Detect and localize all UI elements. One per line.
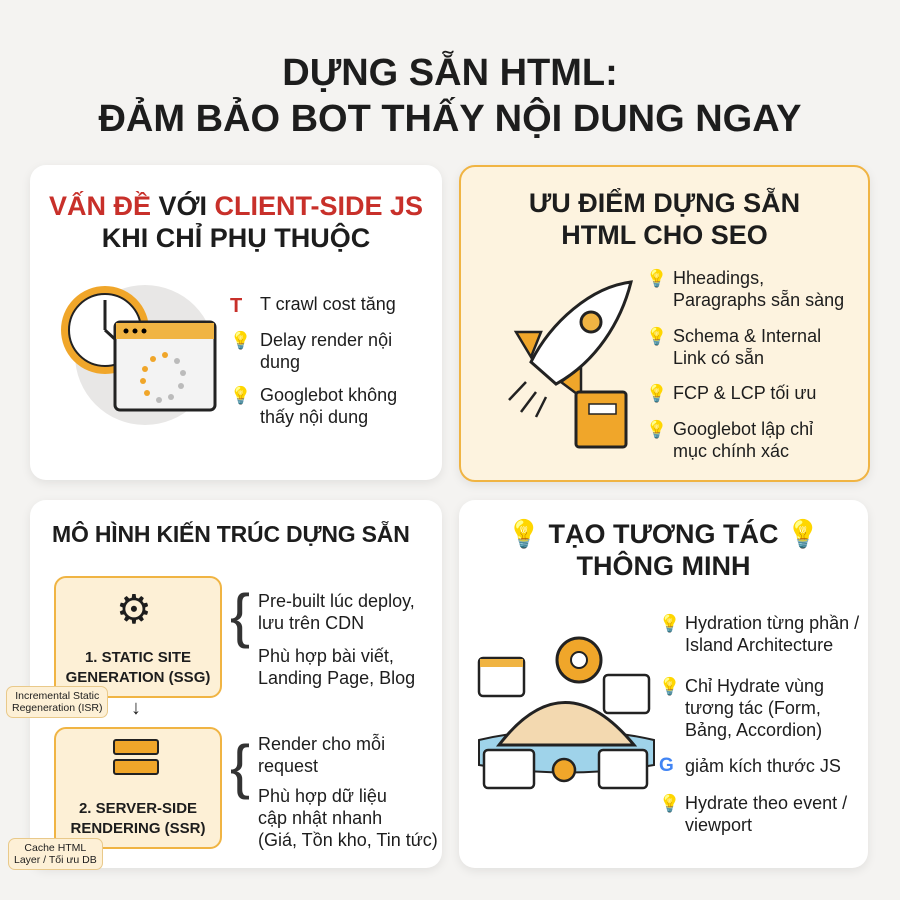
panel: interaction xyxy=(459,500,868,868)
tag: cache: Layer / Tối ưu DB xyxy=(14,854,97,866)
heading: advantages: ƯU ĐIỂM DỰNG SẴN xyxy=(529,188,800,218)
box: SSG: ⚙ xyxy=(116,588,152,632)
text: SSR details: Phù hợp dữ liệu xyxy=(258,786,387,806)
box: SSG: 1. STATIC SITE xyxy=(85,649,191,666)
text: SSG details: { xyxy=(230,582,250,649)
list: interaction: Hydration từng phần / xyxy=(685,613,859,633)
list: problems: Delay render nội xyxy=(260,330,392,350)
heading: architecture: MÔ HÌNH KIẾN TRÚC DỰNG SẴN xyxy=(52,521,410,547)
list: problems xyxy=(230,294,397,427)
heading: problem: VẤN ĐỀ VỚI CLIENT-SIDE JS xyxy=(49,191,423,221)
text: SSR details: Render cho mỗi xyxy=(258,734,385,754)
list: interaction xyxy=(659,613,860,835)
text: SSG details: Pre-built lúc deploy, xyxy=(258,591,415,611)
box: SSR: 2. SERVER-SIDE xyxy=(79,800,197,817)
title: ĐẢM BẢO BOT THẤY NỘI DUNG NGAY xyxy=(98,98,802,140)
list: problems: T crawl cost tăng xyxy=(260,294,396,314)
list: problems: Googlebot không xyxy=(260,385,397,405)
list: advantages: 💡 xyxy=(646,269,667,288)
list: interaction: 💡 xyxy=(659,794,680,813)
list: problems: T xyxy=(230,295,242,317)
list: interaction: Island Architecture xyxy=(685,635,833,655)
list: advantages: 💡 xyxy=(646,384,667,403)
list: advantages: Schema & Internal xyxy=(673,326,821,346)
list: interaction: viewport xyxy=(685,815,752,835)
list: advantages: 💡 xyxy=(646,420,667,439)
list: interaction: 💡 xyxy=(659,677,680,696)
text: SSG details: lưu trên CDN xyxy=(258,613,364,633)
list: advantages: Paragraphs sẵn sàng xyxy=(673,290,844,310)
list: advantages: 💡 xyxy=(646,327,667,346)
icon: clock and browser xyxy=(61,285,216,425)
tag: cache xyxy=(8,838,103,870)
list: advantages: FCP & LCP tối ưu xyxy=(673,383,816,403)
box: SSR: RENDERING (SSR) xyxy=(70,820,206,837)
heading: advantages: HTML CHO SEO xyxy=(561,220,768,250)
list: interaction: giảm kích thước JS xyxy=(685,756,841,776)
heading: interaction: THÔNG MINH xyxy=(576,551,750,581)
text: SSR details: { xyxy=(230,733,250,800)
box: SSG: GENERATION (SSG) xyxy=(66,669,210,686)
list: interaction: Bảng, Accordion) xyxy=(685,720,822,740)
tag: ISR: Regeneration (ISR) xyxy=(12,702,102,714)
list: problems: dung xyxy=(260,352,300,372)
panel: problem xyxy=(30,165,442,480)
heading: interaction: 💡 TẠO TƯƠNG TÁC 💡 xyxy=(507,519,820,549)
tag: ISR: Incremental Static xyxy=(15,690,99,702)
panel: architecture xyxy=(30,500,442,868)
list: problems: 💡 xyxy=(230,386,251,405)
list: advantages: Link có sẵn xyxy=(673,348,764,368)
title: DỰNG SẴN HTML: xyxy=(282,52,618,94)
title xyxy=(98,50,802,140)
heading: advantages xyxy=(529,188,800,250)
text: SSR details: cập nhật nhanh xyxy=(258,808,382,828)
list: interaction: Hydrate theo event / xyxy=(685,793,847,813)
list: advantages: Googlebot lập chỉ xyxy=(673,419,813,439)
icon: rocket and book xyxy=(508,280,633,448)
text: SSG details xyxy=(230,582,415,688)
box: SSG xyxy=(54,576,222,698)
text: SSR details xyxy=(230,733,438,850)
list: problems: 💡 xyxy=(230,331,251,350)
list: advantages xyxy=(646,268,844,461)
icon: island illustration xyxy=(478,636,655,790)
text: SSG details: Phù hợp bài viết, xyxy=(258,646,394,666)
heading: problem: KHI CHỈ PHỤ THUỘC xyxy=(102,223,370,253)
text: SSG details: Landing Page, Blog xyxy=(258,668,415,688)
list: interaction: G xyxy=(659,755,674,776)
tag: cache: Cache HTML xyxy=(24,842,86,854)
list: advantages: Hheadings, xyxy=(673,268,764,288)
arrow: SSG to SSR: ↓ xyxy=(131,697,141,719)
list: problems: thấy nội dung xyxy=(260,407,368,427)
tag: ISR xyxy=(6,686,108,718)
box: SSR xyxy=(54,727,222,849)
list: interaction: 💡 xyxy=(659,614,680,633)
panel: advantages xyxy=(459,165,870,482)
list: interaction: tương tác (Form, xyxy=(685,698,821,718)
text: SSR details: (Giá, Tồn kho, Tin tức) xyxy=(258,830,438,850)
list: interaction: Chỉ Hydrate vùng xyxy=(685,676,824,696)
list: advantages: mục chính xác xyxy=(673,441,789,461)
heading: problem xyxy=(49,191,423,253)
text: SSR details: request xyxy=(258,756,318,776)
heading: interaction xyxy=(507,518,820,581)
